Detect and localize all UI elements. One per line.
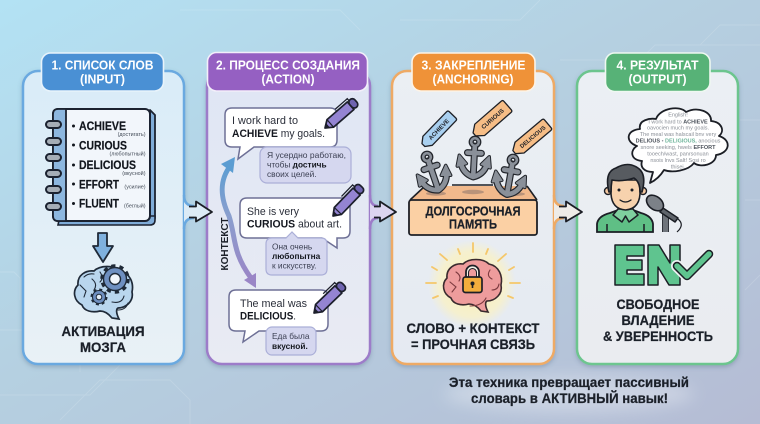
footer message: Эта техника превращает пассивный <box>449 374 689 390</box>
panel 4 badge: 4. РЕЗУЛЬТАТ <box>616 57 699 72</box>
caption: fluency and confidence <box>603 296 713 344</box>
panel 4 badge <box>606 53 710 92</box>
tag: achieve <box>419 110 457 150</box>
icon: brain with lock <box>426 240 520 328</box>
icon: notebook with word list: (усилие) <box>124 184 146 190</box>
caption: fluency and confidence: СВОБОДНОЕ <box>616 296 700 312</box>
icon: pen 1 <box>320 95 359 132</box>
bubble: curious sentence <box>240 198 350 248</box>
icon: anchor 2 <box>457 137 492 178</box>
bubble: delicious sentence <box>229 290 328 342</box>
icon: memory box: ДОЛГОСРОЧНАЯ <box>426 204 521 218</box>
icon: brain with gears <box>75 266 132 319</box>
icon: notebook with word list: ACHIEVE <box>79 121 126 133</box>
caption: word plus context <box>406 320 540 352</box>
arrow: step 2 to step 3 <box>370 195 396 229</box>
icon: anchor 1 <box>410 148 454 195</box>
arrow: notebook to brain <box>93 233 113 262</box>
icon: memory box: ПАМЯТЬ <box>449 218 497 232</box>
icon: notebook with word list <box>46 109 155 225</box>
panel 1 badge: (INPUT) <box>80 71 125 86</box>
caption: word plus context: СЛОВО + КОНТЕКСТ <box>406 320 540 336</box>
icon: notebook with word list: (вкусной) <box>122 170 146 177</box>
speech cloud with fluent text: The meal was halscail bnv very <box>640 132 716 138</box>
panel 1 badge <box>42 53 164 91</box>
caption: fluency and confidence: ВЛАДЕНИЕ <box>622 312 694 328</box>
bubble: curious translation: Она очень <box>272 242 312 252</box>
caption: brain activation: МОЗГА <box>80 339 126 355</box>
arrow: step 1 to step 2 <box>184 195 212 229</box>
panel: 2 action <box>207 52 370 364</box>
footer message <box>444 374 694 412</box>
panel 3 card <box>392 71 554 364</box>
speech cloud with fluent text: thisei. <box>671 164 686 170</box>
bubble: curious translation: любопытна <box>272 251 321 261</box>
speech cloud with fluent text: DELIOUS • DELIGIOUS, anocious <box>636 138 721 144</box>
panel 2 card <box>207 71 370 364</box>
speech cloud with fluent text: oavocien much my goals. <box>647 126 709 132</box>
bubble: achieve sentence: I work hard to <box>232 115 298 127</box>
speech cloud with fluent text: tooech/wast, panrsonuan <box>647 152 709 158</box>
speech cloud with fluent text: snore seeking, hwels EFFORT <box>641 145 716 151</box>
caption: brain activation: АКТИВАЦИЯ <box>62 323 144 339</box>
bubble: curious translation <box>266 232 327 275</box>
speech cloud with fluent text: nsois lnvs Salt! Sosi ro <box>650 158 706 164</box>
panel 2 badge: 2. ПРОЦЕСС СОЗДАНИЯ <box>216 57 360 72</box>
caption: word plus context: = ПРОЧНАЯ СВЯЗЬ <box>411 336 535 352</box>
bubble: achieve sentence <box>225 108 337 159</box>
bubble: delicious translation: Еда была <box>272 331 310 341</box>
panel 3 badge <box>412 53 535 91</box>
tag: curious <box>469 100 513 140</box>
tag: achieve: ACHIEVE <box>428 118 451 142</box>
arrow: context flow <box>221 157 256 288</box>
panel 2 badge: (ACTION) <box>262 71 314 86</box>
icon: notebook with word list: CURIOUS <box>79 140 127 152</box>
panel 1 card <box>23 71 184 364</box>
caption: fluency and confidence: & УВЕРЕННОСТЬ <box>603 328 713 344</box>
speech cloud with fluent text: I work hard to ACHIEVE <box>648 120 708 126</box>
bubble: curious sentence: CURIOUS about art. <box>247 218 342 230</box>
panel 4 card <box>577 71 738 364</box>
tag: curious: CURIOUS <box>481 108 506 131</box>
icon: notebook with word list: FLUENT <box>79 199 119 211</box>
bubble: achieve translation: чтобы достичь <box>267 160 327 170</box>
label: context: КОНТЕКСТ <box>219 217 231 270</box>
panel: 4 output <box>577 53 738 364</box>
icon: notebook with word list: (беглый) <box>124 202 146 210</box>
panel 2 badge <box>208 52 368 91</box>
icon: pen 3 <box>309 279 347 317</box>
panel: 3 anchoring <box>392 53 554 364</box>
icon: anchor 3 <box>491 153 530 197</box>
panel: 1 input <box>23 53 184 364</box>
icon: memory box <box>409 185 537 235</box>
bubble: delicious sentence: The meal was <box>240 298 307 310</box>
caption: brain activation <box>62 323 144 355</box>
tag: delicious: DELICIOUS <box>519 125 547 150</box>
icon: notebook with word list: (любопытный) <box>110 151 146 158</box>
icon: pen 2 <box>328 181 365 219</box>
bubble: achieve translation: Я усердно работаю, <box>267 150 346 160</box>
panel 3 badge: (ANCHORING) <box>432 71 514 86</box>
bubble: delicious translation <box>266 327 316 355</box>
icon: EN with check mark <box>615 245 709 285</box>
arrow: step 3 to step 4 <box>554 195 582 229</box>
panel 4 badge: (OUTPUT) <box>628 71 686 86</box>
tag: delicious <box>510 118 552 158</box>
footer message: словарь в АКТИВНЫЙ навык! <box>471 389 668 406</box>
speech cloud with fluent text: English! <box>668 112 688 118</box>
bubble: achieve translation <box>260 147 351 183</box>
icon: speaker <box>597 164 653 232</box>
bubble: delicious translation: вкусной. <box>272 341 308 351</box>
panel 3 badge: 3. ЗАКРЕПЛЕНИЕ <box>422 57 526 72</box>
icon: notebook with word list: EFFORT <box>79 180 119 192</box>
bubble: achieve translation: своих целей. <box>267 169 317 179</box>
icon: notebook with word list: DELICIOUS <box>79 160 136 172</box>
speech cloud with fluent text <box>629 108 728 183</box>
bubble: curious sentence: She is very <box>247 206 299 218</box>
icon: notebook with word list: (достигать) <box>118 132 146 138</box>
panel 1 badge: 1. СПИСОК СЛОВ <box>52 57 154 72</box>
bubble: curious translation: к искусству. <box>272 260 316 270</box>
bubble: delicious sentence: DELICIOUS. <box>240 310 296 322</box>
bubble: achieve sentence: ACHIEVE my goals. <box>232 128 325 140</box>
icon: microphone <box>644 192 681 232</box>
